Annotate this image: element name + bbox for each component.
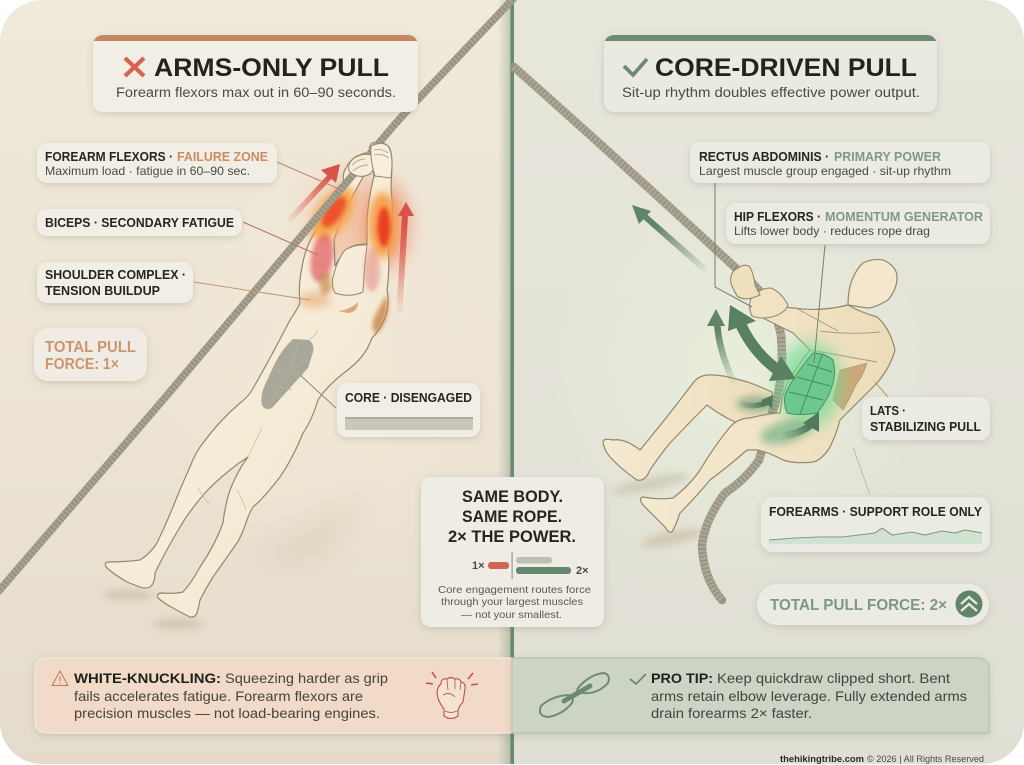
subheading: Forearm flexors max out in 60–90 seconds. <box>116 85 396 100</box>
center card: same body same rope: — not your smallest. <box>461 609 562 621</box>
torso and near leg <box>640 305 895 532</box>
label: hip flexors: Lifts lower body · reduces rope drag <box>734 224 930 238</box>
label: core disengaged <box>337 383 480 437</box>
arrow: curved hip sweep <box>707 309 735 385</box>
pro tip panel: arms retain elbow leverage. Fully extended arms <box>651 688 967 704</box>
label: forearm flexors: Maximum load · fatigue in 60–90 sec. <box>45 164 250 178</box>
label: rectus abdominis <box>690 142 990 183</box>
right figure: core-driven climber <box>603 259 897 551</box>
arrow: double-headed core rhythm <box>728 305 796 381</box>
heading: CORE-DRIVEN PULL <box>655 54 917 82</box>
label: hip flexors: HIP FLEXORS · <box>734 209 821 224</box>
center card: same body same rope: through your largest muscles <box>441 596 583 608</box>
title card: core-driven pull <box>604 35 937 112</box>
head <box>332 245 367 295</box>
callout: total pull force 1x: FORCE: 1× <box>45 356 119 373</box>
leader lines: right <box>715 183 888 495</box>
hands gripping rope <box>349 144 392 178</box>
arrow: upward rope pull <box>632 205 709 273</box>
muscle heat: forearms <box>302 179 398 258</box>
icon: check <box>630 674 646 684</box>
label: rectus abdominis: Largest muscle group engaged · sit-up rhythm <box>699 164 951 178</box>
pro tip panel: Keep quickdraw clipped short. Bent <box>717 670 950 686</box>
icon: clenched fist <box>426 672 478 718</box>
label: shoulder complex: TENSION BUILDUP <box>45 283 160 298</box>
callout: total pull force 2x <box>757 584 989 625</box>
core green glow <box>778 342 842 426</box>
heading: ARMS-ONLY PULL <box>154 54 389 82</box>
label: hip flexors: MOMENTUM GENERATOR <box>825 209 984 224</box>
rope passing over far leg <box>762 335 782 452</box>
arrow: thigh lift far <box>740 395 773 408</box>
label: lats: STABILIZING PULL <box>870 419 981 434</box>
muscle heat: biceps and shoulders <box>299 232 388 333</box>
callout: total pull force 1x <box>34 328 147 381</box>
callout: total pull force 2x: TOTAL PULL FORCE: 2× <box>770 597 947 614</box>
pro tip panel: PRO TIP: <box>651 670 713 686</box>
label: shoulder complex <box>37 262 193 303</box>
label: forearms support with sparkline <box>761 497 990 552</box>
center card: same body same rope: SAME BODY. <box>462 487 563 506</box>
icon: warning triangle <box>52 671 68 686</box>
footer credit <box>780 754 984 765</box>
near hand <box>750 288 788 318</box>
pro tip panel: drain forearms 2× faster. <box>651 705 812 721</box>
far hand <box>731 265 760 299</box>
body creases <box>198 330 318 510</box>
icon: red X <box>125 58 144 76</box>
far leg <box>603 375 775 480</box>
icon: green check <box>624 59 647 75</box>
center card: same body same rope: SAME ROPE. <box>462 507 562 526</box>
icon: quickdraw carabiners <box>540 673 609 717</box>
label: biceps: BICEPS · SECONDARY FATIGUE <box>45 215 234 230</box>
center card: same body same rope <box>421 477 604 627</box>
shoulder crease lines <box>796 308 880 362</box>
rope: right, upper and free tail <box>514 67 782 600</box>
label: biceps <box>37 209 242 236</box>
leader lines: left <box>194 162 337 408</box>
warning panel: white-knuckling: WHITE-KNUCKLING: <box>74 670 221 686</box>
right arrow: forearm load <box>398 202 414 318</box>
comparison mini bars <box>472 552 589 579</box>
label: lats: LATS · <box>870 403 906 418</box>
center card: same body same rope: 2× THE POWER. <box>448 527 576 546</box>
label: rectus abdominis: RECTUS ABDOMINIS · <box>699 149 829 164</box>
callout: total pull force 1x: TOTAL PULL <box>45 339 136 356</box>
arrow: thigh lift near <box>782 412 819 436</box>
label: hip flexors <box>726 203 990 244</box>
warning panel: white-knuckling: fails accelerates fatigue. Forearm flexors are <box>74 688 363 704</box>
pro tip panel <box>512 658 989 733</box>
left figure body silhouette <box>105 142 392 617</box>
sparkline <box>769 528 982 544</box>
head <box>848 259 897 308</box>
lats <box>833 363 867 410</box>
label: forearm flexors <box>37 143 277 183</box>
footer credit: © 2026 | All Rights Reserved <box>867 754 984 765</box>
warning panel: white-knuckling: Squeezing harder as grip <box>225 670 388 686</box>
comparison mini bars: 1× <box>472 560 485 572</box>
footer credit: thehikingtribe.com <box>780 754 864 765</box>
icon: double chevron <box>956 590 982 618</box>
label: forearm flexors: FAILURE ZONE <box>177 149 268 164</box>
title card: arms-only pull <box>93 35 418 112</box>
warning panel: white-knuckling: precision muscles — not load-bearing engines. <box>74 705 380 721</box>
center card: same body same rope: Core engagement routes force <box>438 584 591 596</box>
thigh green glow <box>758 415 814 449</box>
abs <box>784 353 834 414</box>
subheading: Sit-up rhythm doubles effective power output. <box>622 85 920 100</box>
rope: left <box>0 0 514 592</box>
left arrow: forearm load <box>287 164 340 223</box>
left figure: arms-only climber <box>102 142 410 629</box>
label: lats <box>862 397 990 440</box>
label: core disengaged: CORE · DISENGAGED <box>345 390 472 405</box>
label: forearm flexors: FOREARM FLEXORS · <box>45 149 173 164</box>
comparison mini bars: 2× <box>576 565 589 577</box>
warning panel: white-knuckling <box>35 658 512 733</box>
label: shoulder complex: SHOULDER COMPLEX · <box>45 267 186 282</box>
disengaged abs <box>261 339 314 409</box>
label: rectus abdominis: PRIMARY POWER <box>834 149 942 164</box>
label: forearms support with sparkline: FOREARMS · SUPPORT ROLE ONLY <box>769 504 982 519</box>
